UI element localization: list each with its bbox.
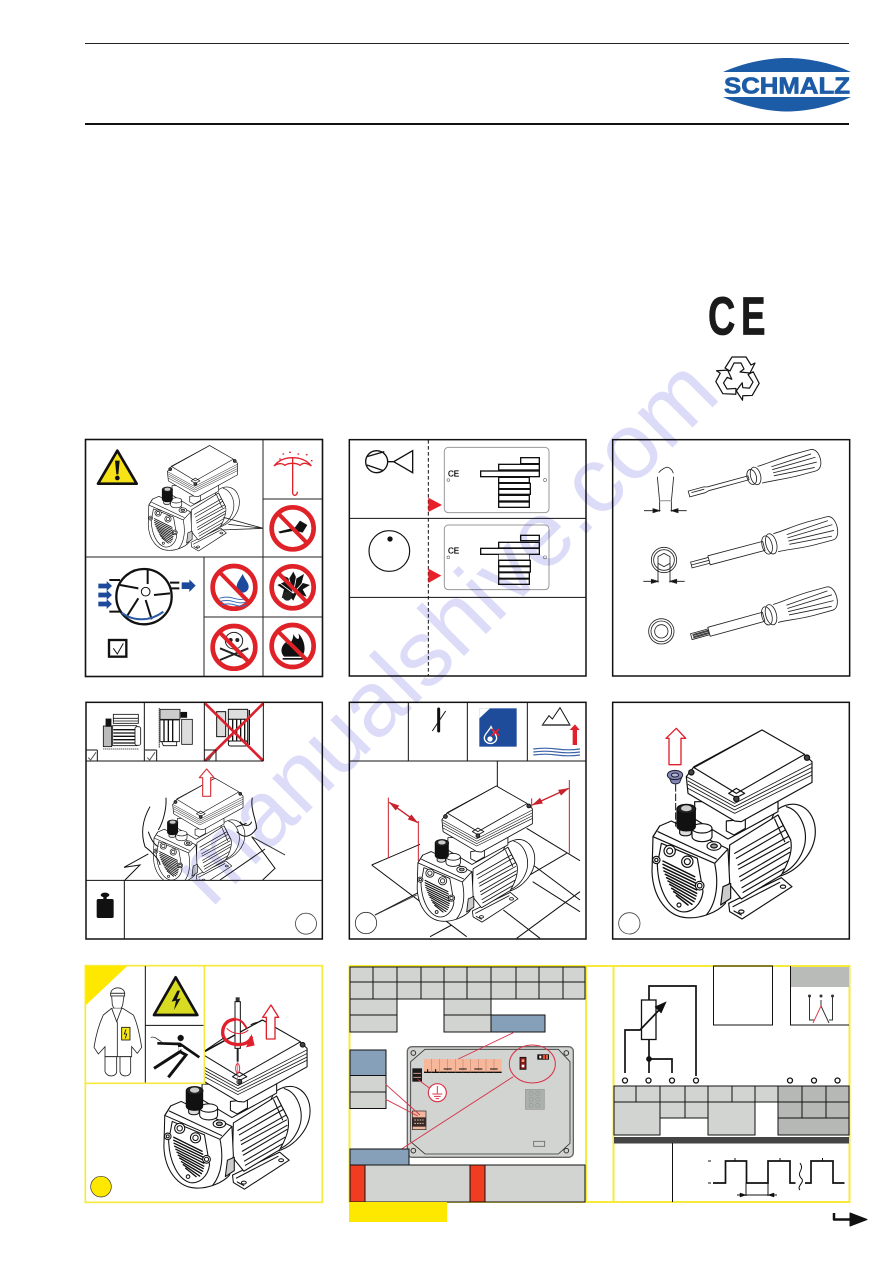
icon: no water <box>213 566 255 609</box>
jumper callout ellipse <box>509 1045 555 1083</box>
rating plate 1: CE <box>448 469 459 478</box>
icon: torx screwdriver <box>688 585 840 648</box>
icon: recycling symbol <box>711 357 763 403</box>
arrow: next page <box>834 1213 867 1226</box>
label circle <box>355 895 417 934</box>
table: bottom row with red markers <box>350 1149 585 1202</box>
icon: vacuum pump symbol <box>366 451 413 473</box>
icon: screwdriver with rotation arrow <box>223 997 255 1083</box>
logo: Schmalz <box>723 58 851 112</box>
icon: technician figure <box>94 988 142 1076</box>
icon: vane pump diagram <box>98 569 196 624</box>
orientation view: not allowed <box>205 703 263 761</box>
icon: torx socket <box>649 619 674 644</box>
icon: warning triangle <box>98 451 137 484</box>
clearance dimension right <box>532 780 569 853</box>
callout lines <box>386 1033 513 1149</box>
panel grid lines <box>86 702 322 939</box>
rating plate 2: CE <box>448 547 459 556</box>
earth symbol callout <box>428 1084 446 1102</box>
center line <box>674 784 677 827</box>
icon: blue plug <box>667 770 683 784</box>
panel: safety warnings <box>86 440 322 676</box>
pump illustration <box>164 1020 310 1189</box>
connector lower <box>412 1111 426 1130</box>
watermark: manualshive.com <box>152 338 737 923</box>
pump illustration clipped at divider <box>124 778 286 880</box>
dark separator band <box>614 1137 849 1144</box>
divider <box>672 1143 673 1202</box>
icon: electric shock person <box>151 1035 199 1077</box>
floor grid <box>372 828 580 938</box>
icon: flat screwdriver <box>686 448 823 505</box>
CE mark: E <box>741 285 765 346</box>
clearance dimension left <box>388 798 418 861</box>
panel: mounting and lifting <box>86 702 322 939</box>
marker arrow 2 <box>428 569 441 583</box>
icon: checkbox <box>109 640 126 657</box>
dimension: flat blade <box>644 467 687 513</box>
table: terminal assignment <box>614 1086 849 1135</box>
icon: no toxic <box>213 626 255 669</box>
leader lines <box>220 517 263 530</box>
panel: tools <box>613 440 850 676</box>
icon: no dust sign <box>479 708 517 747</box>
lift arrow <box>666 728 686 765</box>
yellow note bar <box>349 1202 447 1222</box>
mask behind safety box <box>86 966 204 1083</box>
marker arrow 1 <box>428 498 442 512</box>
lift arrow <box>263 1005 279 1039</box>
icon: weight <box>97 893 114 918</box>
icon: no oil can <box>272 507 314 549</box>
header rule top <box>85 43 849 44</box>
yellow label circle <box>91 1176 111 1197</box>
icon: no fire <box>272 625 314 667</box>
pump illustration <box>417 786 535 922</box>
pump illustration <box>652 730 815 919</box>
cardboard <box>124 837 275 880</box>
circuit board <box>386 1033 573 1157</box>
icon: temperature <box>432 709 446 731</box>
panel: remove transport plug <box>613 702 849 939</box>
terminal strip <box>424 1059 502 1072</box>
small part <box>534 1141 545 1146</box>
icon: keep dry umbrella <box>274 452 312 495</box>
orientation view: horizontal OK <box>103 714 141 749</box>
box: note <box>714 966 772 1025</box>
box: relay contact diagram <box>790 966 849 1025</box>
CE mark <box>708 285 765 346</box>
leader line <box>205 1020 263 1051</box>
table: connection data <box>350 967 585 1108</box>
CE mark: C <box>708 286 735 346</box>
jumpers <box>520 1054 549 1069</box>
corner flag <box>86 966 127 1005</box>
hands <box>143 798 166 865</box>
panel: open electrical cover <box>85 966 322 1202</box>
pump illustration <box>148 446 239 551</box>
logo: Schmalz: SCHMALZ <box>724 72 850 98</box>
safety box lines <box>145 966 204 1083</box>
icon: rotation direction dial <box>369 531 410 571</box>
diagram: potentiometer wiring <box>622 986 840 1083</box>
orientation view: vertical OK <box>159 708 192 748</box>
panel: rating plates <box>349 440 586 676</box>
grey terminal block <box>525 1089 544 1109</box>
icon: no explosives <box>272 566 314 608</box>
header rule bottom <box>85 123 849 125</box>
earth terminal <box>412 1068 422 1082</box>
rating plate 1 <box>444 447 549 513</box>
icon: hex screwdriver <box>688 515 840 577</box>
panel: electrical connections outline <box>350 966 850 1202</box>
panel: installation clearance <box>349 702 586 939</box>
chart: pulse waveform <box>708 1158 844 1197</box>
label circle <box>295 913 316 934</box>
icon: altitude <box>533 708 580 756</box>
icon: electrical hazard triangle <box>154 977 197 1015</box>
rating plate 2 <box>444 525 549 590</box>
lift arrow <box>199 769 214 796</box>
label circle <box>619 913 640 934</box>
dimension: hex socket <box>643 547 685 583</box>
